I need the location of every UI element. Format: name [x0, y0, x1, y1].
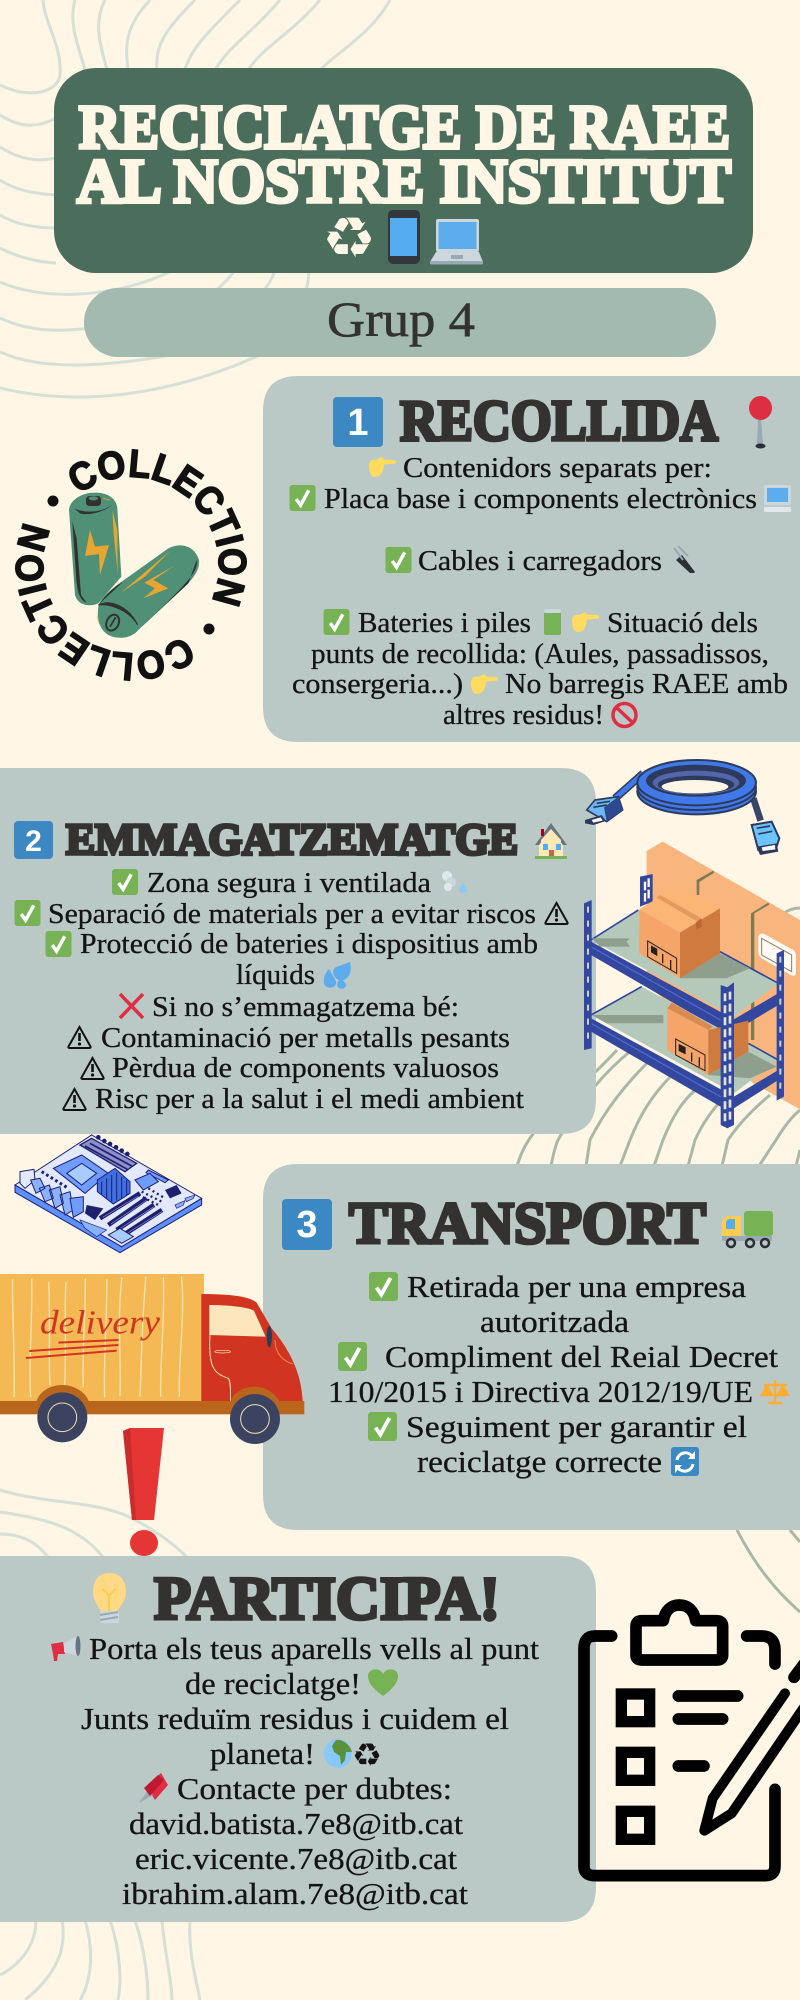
group name: Grup 4 — [327, 291, 475, 347]
icon: truck — [722, 1211, 773, 1247]
text: contact emails: eric.vicente.7e8@itb.cat — [135, 1841, 457, 1876]
text: punts de recollida: punts de recollida: (Aules, passadissos, — [311, 638, 769, 670]
icon: number 2: 2 — [25, 825, 42, 858]
text: de reciclatge: de reciclatge! — [185, 1666, 361, 1701]
delivery script: delivery — [40, 1304, 160, 1341]
illustration: cable — [585, 760, 779, 855]
panel: 1 recollida — [263, 376, 800, 742]
background contour lines: right — [517, 908, 800, 1612]
illustration: motherboard — [15, 1135, 202, 1253]
heading: TRANSPORT — [349, 1190, 706, 1256]
icon: number 1: 1 — [347, 402, 369, 444]
icon: exclamation mark — [123, 1428, 164, 1556]
icon: recycle: ♻ — [322, 206, 376, 271]
text: seguiment: Seguiment per garantir el — [406, 1409, 747, 1444]
text: contaminació: Contaminació per metalls pesants — [101, 1022, 510, 1054]
icon: number 3 — [282, 1199, 332, 1250]
batteries — [69, 493, 199, 638]
illustration: clipboard checklist — [584, 1605, 800, 1876]
text: retirada: autoritzada — [480, 1304, 629, 1339]
text: bateries: Situació dels — [607, 607, 758, 639]
text: porta: Porta els teus aparells vells al punt — [89, 1631, 539, 1666]
text: separació: Separació de materials per a evitar riscos — [48, 898, 536, 930]
title text: RECICLATGE DE RAEE — [79, 94, 730, 162]
ring text: COLLECTION — [14, 523, 193, 682]
text: contacte: Contacte per dubtes: — [177, 1771, 452, 1806]
heading: EMMAGATZEMATGE — [66, 815, 518, 864]
panel: group label — [84, 288, 716, 357]
text: si no s'emmagatzema: Si no s’emmagatzema bé: — [152, 991, 459, 1023]
text: consergeria: No barregis RAEE amb — [505, 668, 788, 700]
illustration: delivery truck — [0, 1274, 304, 1444]
ring text: COLLECTION — [69, 448, 248, 607]
text: contact emails — [122, 1806, 468, 1911]
text: consergeria: consergeria...) — [292, 668, 463, 700]
text: compliment: 110/2015 i Directiva 2012/19/UE — [328, 1374, 753, 1409]
heading: RECOLLIDA — [400, 388, 718, 453]
text: contact emails: david.batista.7e8@itb.cat — [129, 1806, 463, 1841]
text: seguiment — [368, 1409, 747, 1479]
text: junts: Junts reduïm residus i cuidem el — [81, 1701, 509, 1736]
text: retirada: Retirada per una empresa — [407, 1269, 746, 1304]
panel: 2 emmagatzematge — [0, 768, 596, 1134]
text: risc: Risc per a la salut i el medi ambient — [95, 1083, 524, 1115]
text: seguiment: reciclatge correcte — [417, 1444, 662, 1479]
icon: laptop — [430, 219, 483, 264]
text: retirada — [369, 1269, 746, 1339]
icon: number 1 — [333, 397, 383, 447]
text: compliment: Compliment del Reial Decret — [385, 1339, 778, 1374]
text: líquids — [236, 959, 351, 991]
icon: pin — [749, 396, 772, 448]
text: bateries: Bateries i piles — [358, 607, 531, 639]
text: contenidors: Contenidors separats per: — [403, 452, 712, 484]
ring text — [14, 448, 248, 682]
text: planeta: planeta! — [210, 1736, 315, 1771]
illustration: shelves with boxes — [584, 842, 800, 1128]
title text: AL NOSTRE INSTITUT — [77, 148, 731, 216]
text: altres residus: altres residus! — [443, 699, 604, 731]
icon: light bulb — [93, 1573, 126, 1623]
text: planeta — [210, 1736, 382, 1774]
title text — [77, 94, 731, 216]
text: planeta: ♻ — [352, 1736, 382, 1774]
panel: title — [54, 68, 753, 273]
text: cables: Cables i carregadors — [418, 545, 662, 577]
text: compliment — [328, 1339, 788, 1409]
background contour lines: lower left — [0, 1490, 200, 2000]
text: protecció: Protecció de bateries i dispositius amb — [80, 928, 538, 960]
icon: number 3: 3 — [296, 1204, 318, 1246]
text: zona segura: Zona segura i ventilada — [147, 867, 431, 899]
text: líquids: líquids — [236, 959, 315, 991]
heading: PARTICIPA! — [154, 1566, 500, 1633]
panel: 4 participa — [0, 1556, 596, 1922]
icon: number 2 — [14, 821, 53, 859]
icon: house — [535, 823, 567, 859]
text: pèrdua: Pèrdua de components valuosos — [112, 1052, 499, 1084]
background contour lines: top left — [0, 0, 390, 397]
text: contact emails: ibrahim.alam.7e8@itb.cat — [122, 1876, 468, 1911]
icon: collection badge — [14, 448, 248, 682]
panel: 3 transport — [263, 1164, 800, 1530]
text: placa base: Placa base i components electrònics — [324, 483, 757, 515]
text: consergeria — [292, 668, 788, 700]
icon: phone — [388, 210, 420, 264]
text: bateries — [324, 607, 758, 639]
